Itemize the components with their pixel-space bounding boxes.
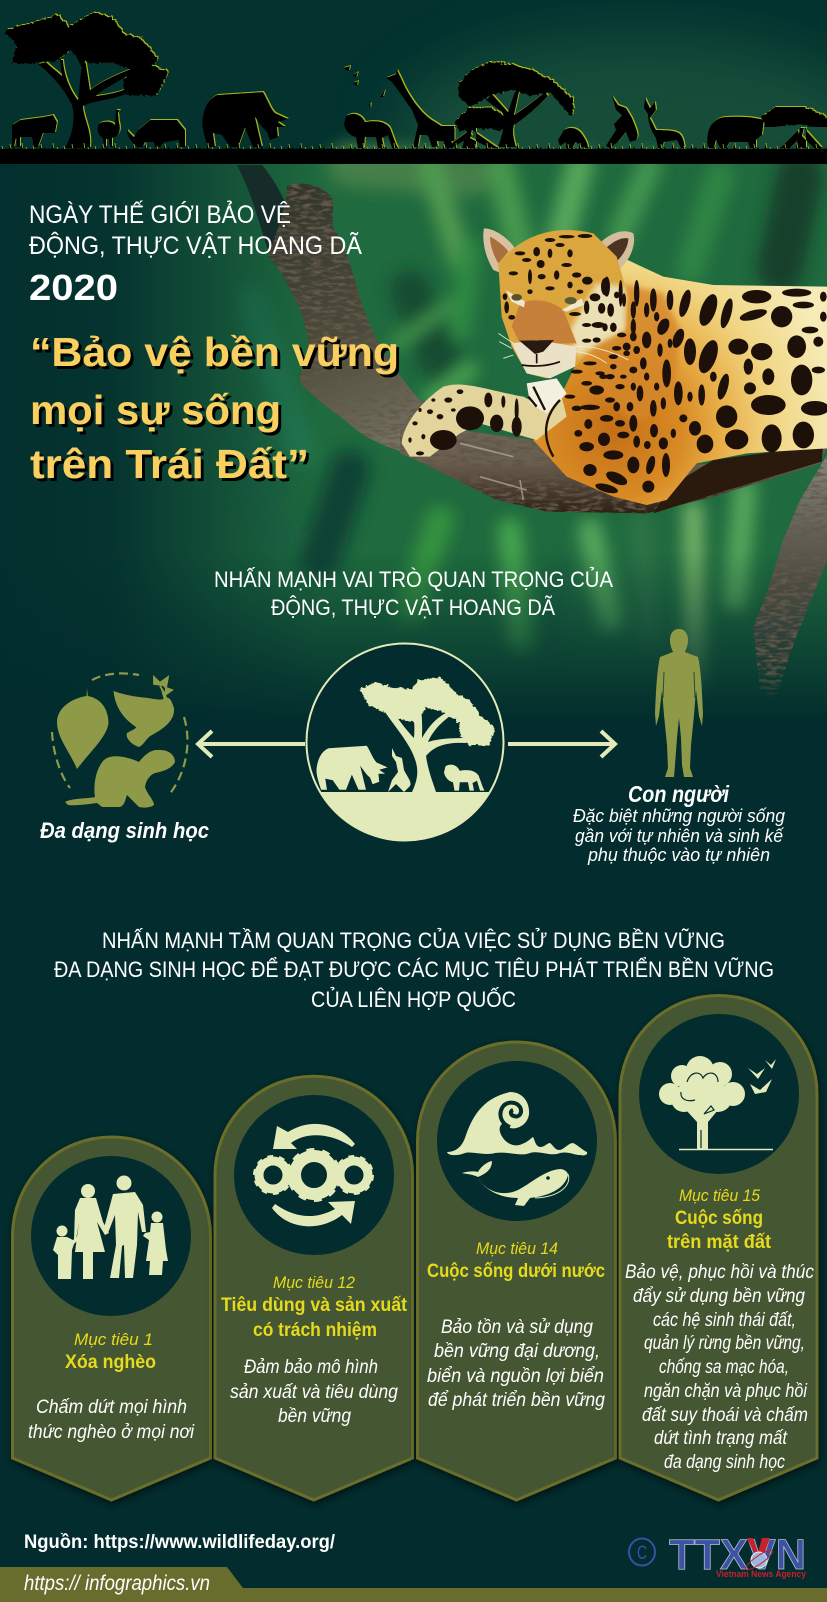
title: theme slogan: mọi sự sống [30, 387, 281, 433]
footer website: https:// infographics.vn [24, 1572, 210, 1595]
text: goal 15: Mục tiêu 15 [679, 1186, 760, 1205]
text: goal 15: chống sa mạc hóa, [659, 1357, 789, 1378]
icon: elephant in circle [316, 746, 388, 790]
title: theme slogan: trên Trái Đất” [30, 441, 309, 487]
icon: wave and whale [447, 1092, 587, 1206]
jaguar body [533, 253, 827, 505]
icon: small monkey [558, 128, 588, 148]
text: goal 15: dứt tình trạng mất [654, 1428, 788, 1449]
icon: hippo [707, 117, 764, 148]
title: event name: NGÀY THẾ GIỚI BẢO VỆ [29, 199, 291, 229]
text: human label: phụ thuộc vào tự nhiên [587, 845, 770, 865]
leaf [57, 688, 108, 769]
text: goal 15: Bảo vệ, phục hồi và thúc [625, 1262, 814, 1283]
source line: Nguồn: https://www.wildlifeday.org/ [24, 1532, 336, 1553]
text: goal 12: có trách nhiệm [253, 1320, 377, 1341]
icon: gears and arrows [256, 1124, 372, 1226]
text: goal 14: Mục tiêu 14 [476, 1239, 558, 1258]
panel: goal 1 [12, 1137, 210, 1500]
text: goal 1: Mục tiêu 1 [74, 1330, 153, 1349]
jaguar head markings [503, 234, 637, 379]
jaguar spots [408, 234, 827, 495]
icon: ostrich [98, 110, 120, 147]
text: goal 12: Đảm bảo mô hình [244, 1357, 378, 1378]
text: human label [573, 781, 785, 865]
text: goal 15: các hệ sinh thái đất, [653, 1310, 796, 1331]
icon: giraffe [386, 70, 452, 147]
text: goal 15: Cuộc sống [675, 1208, 763, 1229]
title: year: 2020 [29, 267, 118, 308]
icon: tree in circle [363, 680, 492, 792]
heading: sustainable use of biodiversity: NHẤN MẠNH TẦM QUAN TRỌNG CỦA VIỆC SỬ DỤNG BỀN VỮNG [102, 928, 725, 953]
grass line [0, 139, 827, 151]
text: goal 14: biển và nguồn lợi biển [427, 1366, 604, 1387]
footer strip [0, 1567, 827, 1602]
black ground strip [0, 149, 827, 164]
text: goal 1 [28, 1330, 195, 1443]
bird [114, 691, 174, 747]
heading: sustainable use of biodiversity: CỦA LIÊN HỢP QUỐC [311, 986, 516, 1012]
text: human label: Đặc biệt những người sống [573, 806, 785, 826]
text: goal 14: để phát triển bền vững [428, 1390, 605, 1411]
text: goal 12 [221, 1273, 408, 1427]
panel: goal 12 [215, 1076, 412, 1500]
icon: rhino [127, 120, 185, 147]
jaguar on branch [400, 228, 827, 513]
ferret [65, 750, 175, 808]
logo: copyright mark: C [637, 1543, 647, 1564]
text: goal 15: trên mặt đất [667, 1232, 772, 1253]
jaguar orange neck shading [593, 283, 680, 423]
text: goal 14: Cuộc sống dưới nước [427, 1261, 605, 1282]
jaguar foreleg and paw [402, 384, 567, 457]
title: event name [29, 199, 362, 260]
icon: family [53, 1176, 168, 1279]
arrow: left [198, 731, 305, 757]
text: goal 15: đất suy thoái và chấm [642, 1405, 808, 1426]
arrow: right [508, 731, 615, 757]
title: theme slogan [30, 329, 399, 487]
icon: leaping deer [606, 96, 638, 148]
text: goal 14: Bảo tồn và sử dụng [441, 1317, 593, 1338]
heading: sustainable use of biodiversity [54, 928, 774, 1012]
heading: role of wildlife [214, 567, 613, 620]
jaguar cheek [570, 283, 625, 357]
top silhouette band [0, 15, 827, 164]
icon: right tree [764, 108, 827, 148]
heading: role of wildlife: ĐỘNG, THỰC VẬT HOANG DÃ [271, 595, 555, 620]
panel: goal 15 [620, 996, 817, 1500]
icon: wildebeest [12, 115, 57, 147]
jaguar muzzle [506, 290, 584, 378]
logo: TTXVN: Vietnam News Agency [716, 1569, 807, 1580]
sprig [154, 677, 172, 718]
text: goal 14: bền vững đại dương, [434, 1341, 600, 1362]
icon: umbrella tree [461, 64, 571, 147]
title: theme slogan: “Bảo vệ bền vững [30, 329, 399, 375]
heading: role of wildlife: NHẤN MẠNH VAI TRÒ QUAN TRỌNG CỦA [214, 567, 613, 592]
icon: small tree [429, 109, 506, 148]
text: goal 15 [625, 1186, 814, 1473]
text: goal 1: Chấm dứt mọi hình [36, 1397, 187, 1418]
icon: elephant [202, 92, 288, 147]
text: goal 12: bền vững [278, 1406, 351, 1427]
dashed ring [52, 673, 187, 795]
jaguar head [498, 230, 628, 378]
jaguar chest [527, 378, 567, 413]
text: goal 12: Tiêu dùng và sản xuất [221, 1295, 408, 1316]
text: goal 12: Mục tiêu 12 [273, 1273, 355, 1292]
silhouettes with yellow edge [8, 15, 827, 148]
icon: tree and birds [659, 1056, 776, 1150]
text: goal 15: đa dạng sinh học [664, 1452, 785, 1473]
title block [29, 199, 399, 487]
logo: copyright mark [629, 1538, 655, 1566]
text: goal 14 [427, 1239, 605, 1411]
right tree trunk [753, 455, 827, 700]
text: goal 1: Xóa nghèo [65, 1352, 156, 1373]
icon: standing deer [644, 98, 685, 148]
text: human label: gần với tự nhiên và sinh kế [575, 826, 785, 846]
icon: biodiversity leaf, bird and ferret [52, 673, 187, 808]
center circle: wildlife scene [306, 644, 504, 841]
icon: birds [343, 66, 385, 109]
logo: TTXVN: TTXVN [669, 1531, 806, 1579]
jaguar whiskers [498, 333, 628, 363]
text: goal 15: đẩy sử dụng bền vững [633, 1286, 805, 1307]
text: biodiversity label: Đa dạng sinh học [40, 818, 209, 843]
icon: big acacia tree [8, 15, 165, 148]
jaguar ears [483, 228, 634, 273]
photo background: blurred jungle foliage [0, 160, 827, 722]
icon: lion [344, 114, 398, 148]
text: goal 1: thức nghèo ở mọi nơi [28, 1422, 195, 1443]
text: human label: Con người [628, 781, 730, 807]
text: goal 12: sản xuất và tiêu dùng [230, 1382, 398, 1403]
title: event name: ĐỘNG, THỰC VẬT HOANG DÃ [29, 231, 362, 260]
panel: goal 14 [418, 1042, 616, 1500]
upper branch of the tree [237, 165, 440, 452]
branch under jaguar [400, 400, 827, 513]
icon: human [655, 629, 703, 777]
icon: deer in circle [388, 748, 411, 792]
icon: lion in circle [444, 765, 484, 791]
